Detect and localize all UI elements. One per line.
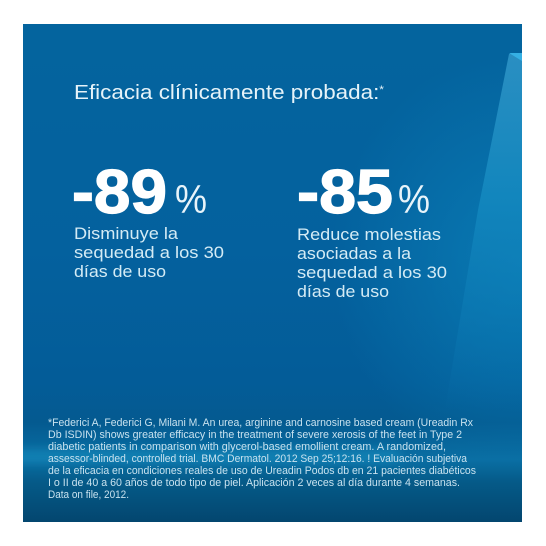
stat: -89%: -89 [72,158,167,227]
footnote: diabetic patients in comparison with glycerol-based emollient cream. A randomized, [48,441,446,453]
stat: -89%: % [175,178,207,222]
beam highlight [509,53,522,61]
stat description: molestias: Reduce molestias [297,226,441,244]
stat description: sequedad: sequedad a los 30 [74,244,224,262]
stat description: sequedad: días de uso [74,263,166,281]
footnote [48,417,477,501]
footnote: de la eficacia en condiciones reales de uso de Ureadin Podos db en 21 pacientes diabéticos [48,465,477,477]
stat: -85%: -85 [297,158,393,227]
title: Eficacia clínicamente probada: [74,81,353,104]
stat description: sequedad: Disminuye la [74,225,179,243]
light beam shape [464,54,522,293]
stat description: sequedad [74,225,224,281]
stat description: molestias: sequedad a los 30 [297,264,447,282]
stat: -85%: % [398,178,430,222]
stat description: molestias [297,226,447,301]
stat description: molestias: días de uso [297,283,389,301]
bright streak [0,450,400,462]
stat: -89% [72,158,207,227]
footnote: assessor-blinded, controlled trial. BMC Dermatol. 2012 Sep 25;12:16. ! Evaluación subjetiva [48,453,467,465]
title: * [379,84,385,96]
stat description: molestias: asociadas a la [297,245,412,263]
stat: -85% [297,158,430,227]
footnote: I o II de 40 a 60 años de todo tipo de piel. Aplicación 2 veces al día durante 4 semanas. [48,477,460,489]
footnote: Data on file, 2012. [48,489,129,501]
footnote: Db ISDIN) shows greater efficacy in the treatment of severe xerosis of the feet in Type 2 [48,429,462,441]
footnote: *Federici A, Federici G, Milani M. An urea, arginine and carnosine based cream (Ureadin Rx [48,417,474,429]
